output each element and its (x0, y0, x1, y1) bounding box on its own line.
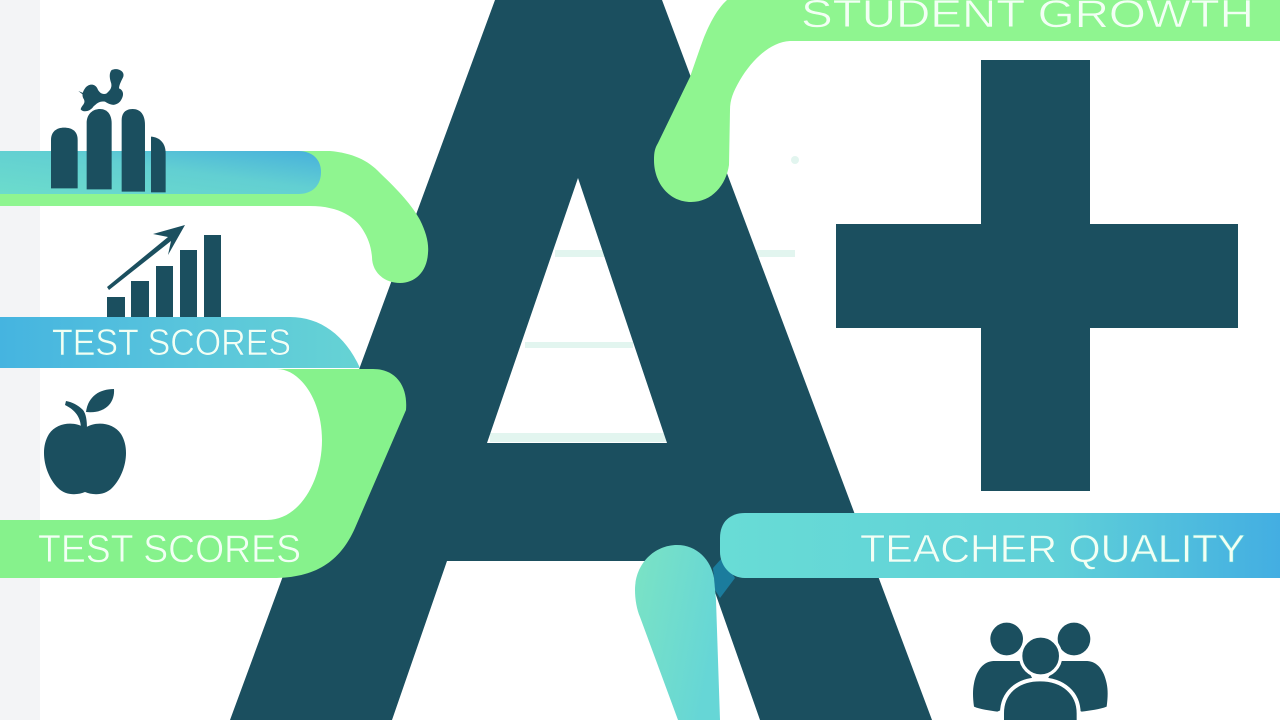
faint guide lines (490, 156, 799, 442)
large plus sign (836, 60, 1238, 491)
icon: group of people (973, 623, 1108, 720)
label: teacher quality: TEACHER QUALITY (860, 528, 1245, 571)
label: test scores green: TEST SCORES (38, 528, 301, 571)
icon: apple (44, 389, 126, 494)
band: teacher quality (720, 513, 1280, 578)
band: test scores (green) (0, 369, 406, 578)
icon: rising bar chart with arrow (107, 225, 221, 318)
label: test scores: TEST SCORES (52, 322, 291, 363)
teal teardrop ribbon (635, 545, 720, 720)
band: test scores (blue) (0, 317, 360, 368)
band: student growth (654, 0, 1280, 202)
top left blue pill (0, 151, 321, 194)
icon: rounded bars with figure (51, 69, 166, 192)
top left green connector ribbon (0, 151, 428, 283)
large letter A (230, 0, 932, 720)
teardrop overlap accent (713, 558, 735, 598)
